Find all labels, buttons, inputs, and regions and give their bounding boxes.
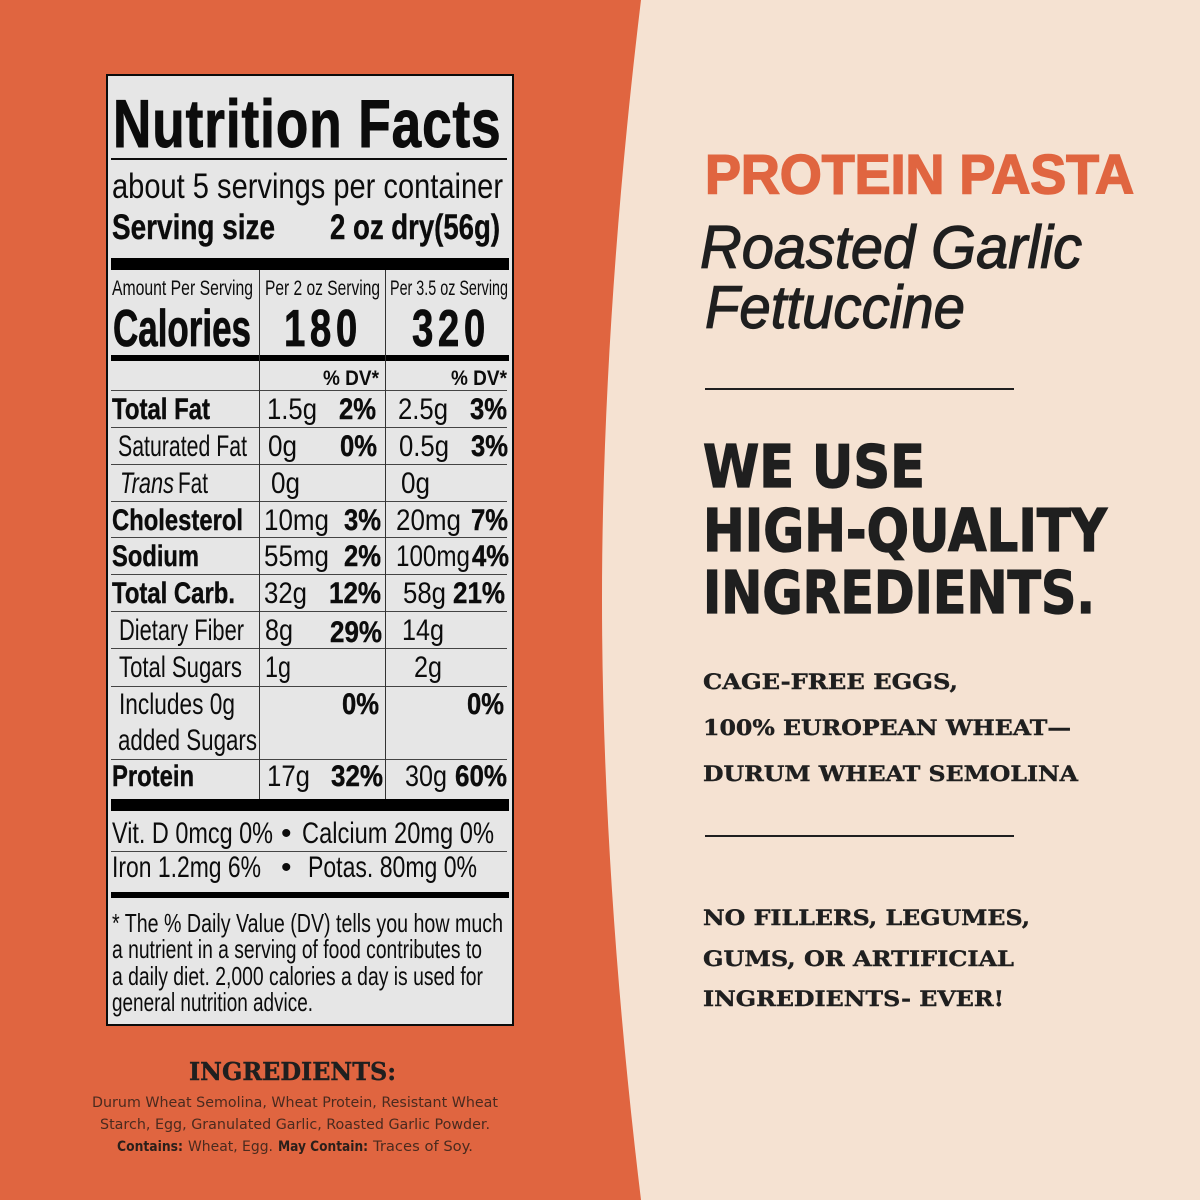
row: total sugars: 2g [414,651,442,684]
ingredients block [92,1057,499,1155]
calories header row: Per 3.5 oz Serving [390,277,508,300]
calories header row: Calories [113,300,251,358]
text block: no fillers claim: INGREDIENTS- EVER! [703,987,1004,1012]
text block: ingredient sourcing: CAGE-FREE EGGS, [703,670,958,695]
headline: we use high-quality ingredients [703,432,1108,627]
vitamins and minerals: • [281,851,292,884]
row: trans fat: 0g [271,467,300,500]
row: dietary fiber: 8g [265,614,293,647]
row: protein: 17g [267,760,310,793]
row: total carb [112,577,505,610]
calories header row: Amount Per Serving [112,277,253,300]
row: dietary fiber: 14g [402,614,444,647]
row: total fat: 2% [339,393,376,426]
calories header row: Per 2 oz Serving [265,277,380,300]
row: saturated fat [118,430,508,463]
row: added sugars: added Sugars [118,724,257,757]
row: total carb: Total Carb. [112,577,235,610]
vitamins and minerals [112,817,494,884]
panel: nutrition facts label [107,75,513,1025]
row: trans fat: Fat [178,467,208,500]
calories header row [112,277,508,358]
daily value footnote: general nutrition advice. [112,987,313,1017]
row: cholesterol: 7% [471,504,508,537]
row: total sugars: 1g [265,651,291,684]
serving size [112,208,500,247]
serving size: Serving size [112,208,275,247]
row: protein: 60% [455,760,507,793]
row: total fat: 2.5g [398,393,448,426]
row: cholesterol: 3% [344,504,381,537]
row: total fat: 1.5g [267,393,317,426]
row: dietary fiber: 29% [330,616,382,649]
row: total carb: 58g [403,577,446,610]
percent daily value headers: % DV* [451,367,508,390]
row: total sugars: Total Sugars [119,651,242,684]
row: trans fat: 0g [401,467,430,500]
daily value footnote: * The % Daily Value (DV) tells you how much [112,908,503,938]
text block: no fillers claim [703,906,1030,1012]
row: saturated fat: 3% [471,430,508,463]
daily value footnote: a daily diet. 2,000 calories a day is used for [112,961,483,991]
ingredients list: Contains: [117,1139,183,1155]
row: cholesterol: 10mg [264,504,329,537]
row: added sugars [118,688,504,757]
row: total fat: 3% [470,393,507,426]
text block: ingredient sourcing: DURUM WHEAT SEMOLINA [703,762,1078,787]
row: total fat: Total Fat [112,393,210,426]
product name: roasted garlic fettuccine: Roasted Garlic [700,214,1082,281]
ingredients list: May Contain: [278,1139,368,1155]
vitamins and minerals: Iron 1.2mg 6% [112,851,261,884]
calories header row: 180 [284,299,357,357]
row: protein: Protein [112,760,194,793]
row: sodium: Sodium [112,540,199,573]
vitamins and minerals: Potas. 80mg 0% [308,851,477,884]
row: total carb: 12% [329,577,381,610]
vitamins and minerals: Calcium 20mg 0% [302,817,494,850]
ingredients list: Wheat, Egg. [188,1139,273,1155]
row: saturated fat: 0% [340,430,377,463]
row: cholesterol: 20mg [396,504,461,537]
row: added sugars: 0% [342,688,379,721]
row: sodium: 2% [344,540,381,573]
row: sodium: 4% [472,540,509,573]
servings per container: about 5 servings per container [112,167,503,206]
row: protein: 30g [405,760,447,793]
row: sodium: 55mg [264,540,329,573]
row: total fat [112,393,507,426]
row: total carb: 32g [264,577,307,610]
ingredients list [92,1095,499,1155]
row: cholesterol: Cholesterol [112,504,243,537]
daily value footnote: a nutrient in a serving of food contributes to [112,934,482,964]
row: dietary fiber [119,614,444,649]
percent daily value headers [323,367,508,390]
product title: protein pasta: PROTEIN PASTA [705,142,1134,206]
row: protein: 32% [331,760,383,793]
row: cholesterol [112,504,508,537]
row: added sugars: 0% [467,688,504,721]
row: trans fat [120,467,430,500]
heading: nutrition facts: Nutrition Facts [113,86,501,161]
product name: roasted garlic fettuccine [700,214,1082,341]
text block: ingredient sourcing [703,670,1078,787]
row: saturated fat: 0g [268,430,297,463]
daily value footnote [112,908,503,1017]
row: total carb: 21% [453,577,505,610]
headline: we use high-quality ingredients: HIGH-QUALITY [703,496,1108,565]
text block: ingredient sourcing: 100% EUROPEAN WHEAT— [703,716,1071,741]
row: saturated fat: 0.5g [399,430,449,463]
calories header row: 320 [412,299,485,357]
row: sodium [112,540,509,573]
percent daily value headers: % DV* [323,367,380,390]
row: dietary fiber: Dietary Fiber [119,614,244,647]
text block: no fillers claim: GUMS, OR ARTIFICIAL [703,947,1014,972]
row: added sugars: Includes 0g [119,688,235,721]
vitamins and minerals: • [281,817,292,850]
headline: we use high-quality ingredients: INGREDIENTS. [703,558,1095,627]
ingredients list: Traces of Soy. [372,1139,473,1155]
orange curved background panel [0,0,641,1200]
headline: we use high-quality ingredients: WE USE [703,432,925,501]
text block: no fillers claim: NO FILLERS, LEGUMES, [703,906,1030,931]
ingredients heading: INGREDIENTS: [189,1057,396,1086]
ingredients list: Durum Wheat Semolina, Wheat Protein, Resistant Wheat [92,1095,499,1111]
row: trans fat: Trans [120,467,174,500]
row: protein [112,760,507,793]
row: saturated fat: Saturated Fat [118,430,247,463]
vitamins and minerals: Vit. D 0mcg 0% [112,817,273,850]
ingredients list: Starch, Egg, Granulated Garlic, Roasted Garlic Powder. [100,1117,490,1133]
row: sodium: 100mg [396,540,470,573]
serving size: 2 oz dry(56g) [330,208,500,247]
product name: roasted garlic fettuccine: Fettuccine [705,274,965,341]
row: total sugars [119,651,442,684]
